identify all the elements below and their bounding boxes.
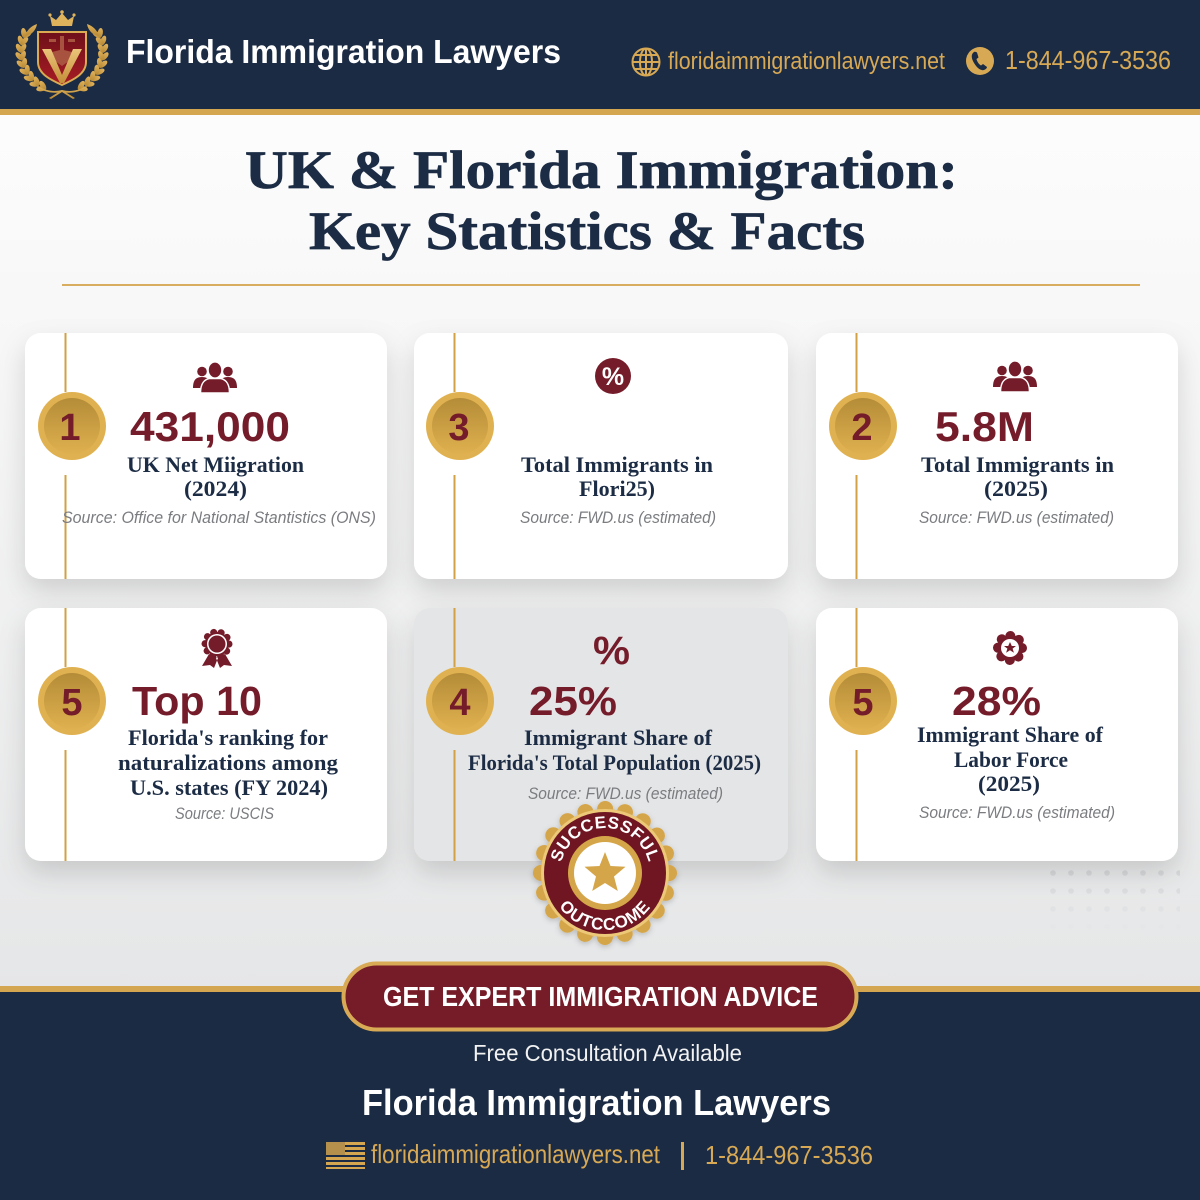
title: UK & Florida Immigration: [245, 140, 958, 200]
seal: successful outcome [531, 801, 679, 949]
stat label: (2025) [978, 771, 1040, 796]
seal: successful outcome: OUTCCOME [561, 900, 650, 930]
badge 1 [38, 392, 106, 460]
badge 5: 5 [852, 682, 874, 724]
header brand name: Florida Immigration Lawyers [126, 33, 561, 70]
badge 3 [426, 392, 494, 460]
icon: globe [632, 48, 660, 76]
stat label: Flori25) [579, 476, 655, 501]
badge 5: 5 [61, 682, 83, 724]
title: Key Statistics & Facts [309, 201, 865, 261]
header website: floridaimmigrationlawyers.net [668, 48, 945, 75]
stat label: Florida's ranking for [128, 725, 328, 750]
panel: immigrant share of labor force [816, 608, 1178, 861]
panel: Florida ranking [25, 608, 387, 861]
badge 3: 3 [448, 407, 470, 449]
stat label: naturalizations among [118, 750, 338, 775]
icon: star flower [998, 636, 1022, 660]
logo: crest with wreath and crown [14, 10, 110, 99]
icon: phone [966, 47, 994, 75]
stat label: Labor Force [954, 747, 1068, 772]
stat value: 28% [952, 678, 1041, 724]
stat label: (2025) [984, 476, 1048, 501]
stat label: Florida's Total Population (2025) [468, 750, 761, 775]
free consultation: Free Consultation Available [473, 1040, 742, 1066]
stat value: 5.8M [935, 403, 1034, 450]
stat value: Top 10 [132, 678, 262, 724]
stat label: UK Net Miigration [127, 452, 304, 477]
decorative dots [1050, 870, 1180, 894]
footer [0, 964, 1200, 1200]
icon: people [993, 361, 1037, 392]
badge 2: 2 [851, 407, 873, 449]
source: Source: FWD.us (estimated) [919, 803, 1115, 822]
stat label: Total Immigrants in [521, 452, 713, 477]
source: Source: Office for National Stantistics (ONS) [62, 508, 376, 527]
badge 1: 1 [59, 407, 81, 449]
icon: rosette [202, 632, 232, 668]
footer website: floridaimmigrationlawyers.net [371, 1139, 661, 1169]
source: Source: FWD.us (estimated) [520, 508, 716, 527]
icon: people [193, 362, 237, 393]
stat label: Total Immigrants in [921, 452, 1114, 477]
stat label: U.S. states (FY 2024) [130, 775, 328, 800]
badge 5 [38, 667, 106, 735]
call to action button [344, 964, 856, 1030]
panel: immigrant share of population [414, 608, 788, 861]
badge 4 [426, 667, 494, 735]
panel: total immigrants 5.8M [816, 333, 1178, 579]
stat label [468, 725, 761, 775]
stat label [127, 452, 304, 501]
badge 4: 4 [449, 682, 471, 724]
stat value: 25% [529, 678, 617, 724]
stat value: 431,000 [130, 403, 290, 450]
source: Source: USCIS [175, 804, 275, 823]
icon: percent circle [595, 358, 631, 394]
stat label: Immigrant Share of [917, 722, 1104, 747]
source: Source: FWD.us (estimated) [919, 508, 1114, 527]
seal: successful outcome: SUCCESSFUL [551, 816, 658, 862]
badge 5 [829, 667, 897, 735]
header phone number: 1-844-967-3536 [1005, 45, 1171, 75]
stat label [917, 722, 1104, 796]
header bar [0, 0, 1200, 115]
icon: percent circle: % [602, 363, 624, 391]
panel: total immigrants in Florida [414, 333, 788, 579]
stat label [921, 452, 1114, 501]
footer phone number: 1-844-967-3536 [705, 1140, 873, 1170]
source: Source: FWD.us (estimated) [528, 784, 723, 803]
title [245, 140, 958, 261]
icon: percent: % [593, 629, 630, 673]
icon: flag [326, 1142, 365, 1169]
panel: UK net migration [25, 333, 387, 579]
stat label [118, 725, 338, 800]
badge 2 [829, 392, 897, 460]
stat label: Immigrant Share of [524, 725, 713, 750]
call to action button: GET EXPERT IMMIGRATION ADVICE [383, 981, 818, 1012]
footer brand name: Florida Immigration Lawyers [362, 1082, 831, 1123]
stat label: (2024) [184, 476, 247, 501]
stat label [521, 452, 713, 501]
